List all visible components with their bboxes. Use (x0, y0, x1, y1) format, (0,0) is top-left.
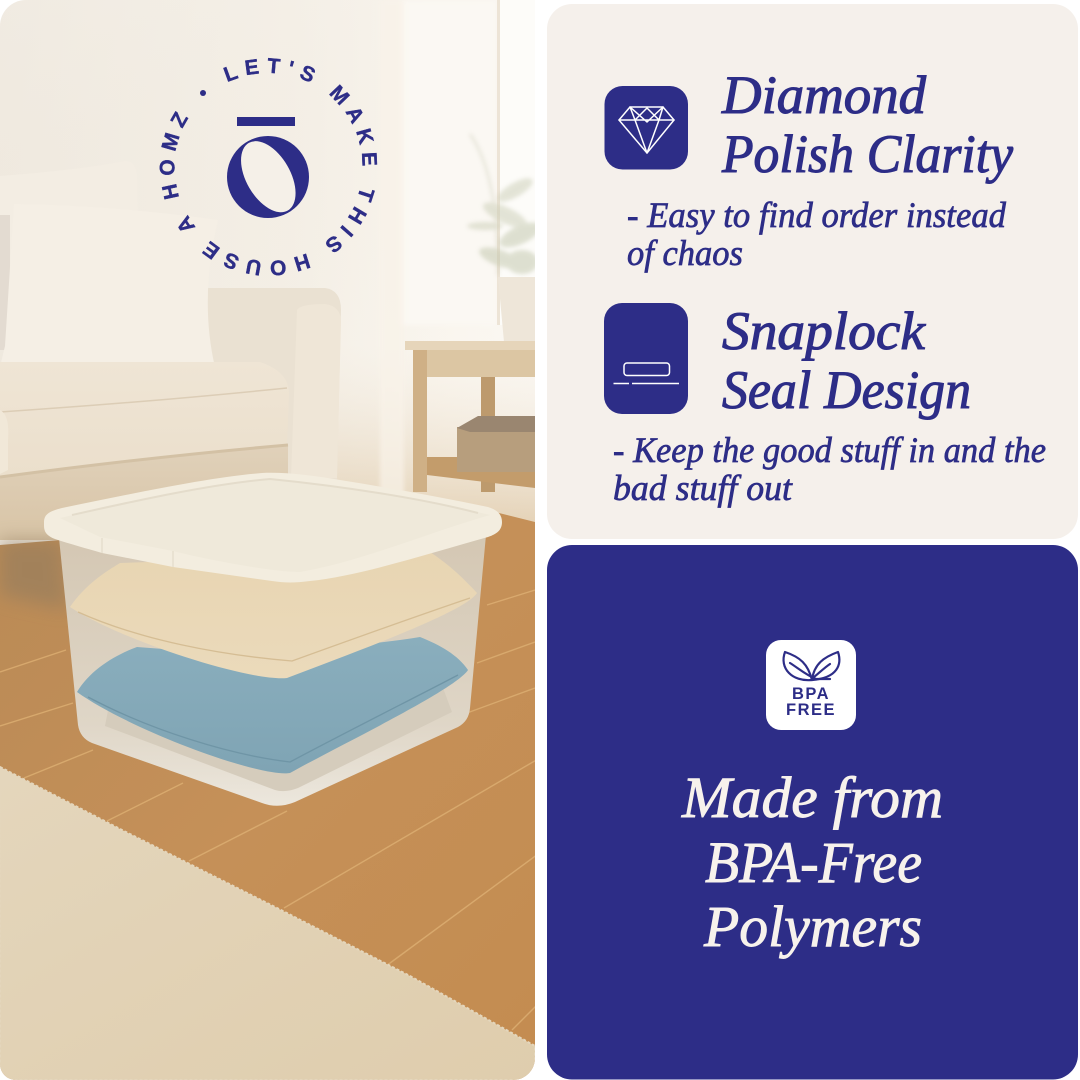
icon: snaplock (604, 303, 688, 414)
photo: living room with storage box (0, 0, 544, 1080)
wood floor (0, 505, 538, 1080)
text: order instead of chaos: - Easy to find order instead (627, 195, 1007, 235)
panel: features (547, 4, 1078, 539)
text: made from bpa-free polymers (681, 765, 943, 959)
blue pillow (77, 637, 468, 773)
icon: diamond (604, 86, 688, 170)
panel: bpa free (547, 545, 1078, 1080)
lid (44, 473, 502, 582)
basket (457, 416, 535, 472)
icon: bpa free badge: FREE (786, 701, 836, 719)
heading: diamond polish clarity (721, 65, 1013, 184)
beige pillow (70, 552, 477, 678)
sofa (0, 215, 341, 540)
text: order instead of chaos: of chaos (627, 233, 743, 273)
storage box with pillows (44, 473, 502, 806)
heading: snaplock seal design (722, 301, 971, 420)
heading: snaplock seal design: Seal Design (722, 360, 971, 420)
plant pot (498, 277, 535, 342)
icon: bpa free badge: BPA (792, 685, 830, 703)
text: good stuff in bad stuff out: bad stuff out (613, 468, 793, 508)
rug (0, 767, 535, 1080)
slogan dot (200, 90, 206, 96)
side table (405, 341, 535, 492)
text: good stuff in bad stuff out: - Keep the good stuff in and the (613, 430, 1046, 470)
brand badge (160, 58, 378, 276)
logo ring (227, 132, 309, 221)
heading: snaplock seal design: Snaplock (722, 301, 926, 361)
logo bar (237, 117, 295, 126)
text: order instead of chaos (627, 195, 1007, 273)
box body (59, 535, 486, 806)
circular slogan: LET'S MAKE THIS HOUSE A HOMZ (160, 58, 378, 276)
plant (467, 134, 535, 276)
icon: bpa free badge (766, 640, 856, 730)
heading: diamond polish clarity: Diamond (721, 65, 927, 125)
text: made from bpa-free polymers: BPA-Free (705, 830, 922, 895)
heading: diamond polish clarity: Polish Clarity (721, 124, 1013, 184)
text: good stuff in bad stuff out (613, 430, 1046, 508)
text: made from bpa-free polymers: Polymers (703, 894, 922, 959)
window and curtain (380, 0, 535, 500)
box inner floor (105, 691, 452, 791)
text: made from bpa-free polymers: Made from (681, 765, 943, 830)
